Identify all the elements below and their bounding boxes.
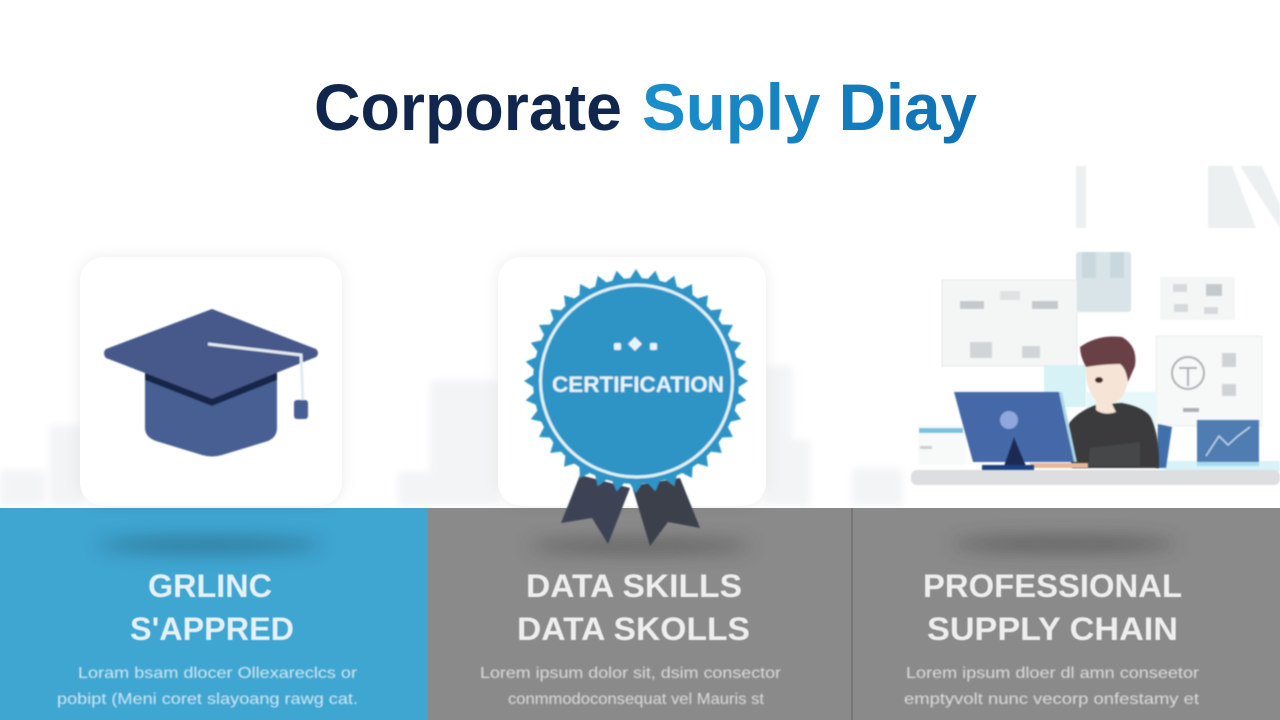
- icon: certification badge: [524, 269, 748, 546]
- panel heading: DATA SKOLLS: [517, 611, 750, 647]
- chair: [1156, 424, 1172, 468]
- panel body text: [480, 665, 782, 708]
- wall chart panel right: [1156, 336, 1262, 426]
- ribbon right: [632, 478, 700, 546]
- icon: graduation cap: [104, 309, 318, 456]
- panel heading: [130, 568, 294, 647]
- panel: professional supply chain: [853, 508, 1280, 720]
- monitor: [954, 392, 1077, 470]
- panel body text: [904, 665, 1200, 708]
- head: [1085, 358, 1128, 414]
- wall chart panel left: [942, 280, 1077, 366]
- faint background shelves: [1076, 166, 1280, 312]
- panel shadow: [98, 538, 322, 552]
- badge seal: [524, 269, 748, 493]
- panel: data skills: [428, 508, 852, 720]
- hair: [1080, 336, 1135, 382]
- panel: grlinc sapped: [0, 508, 428, 720]
- panel shadow: [952, 537, 1176, 551]
- title: Corporate: [314, 70, 622, 144]
- badge label: CERTIFICATION: [552, 372, 724, 397]
- torso: [1068, 403, 1159, 468]
- card: graduation cap: [80, 257, 342, 506]
- small chart tablet: [1197, 420, 1259, 466]
- desk papers: [918, 425, 966, 465]
- ribbon left: [561, 475, 630, 544]
- person: [1068, 336, 1159, 468]
- panel body text: Loram bsam dlocer Ollexareclcs or: [78, 665, 358, 682]
- background skyline: [0, 366, 902, 506]
- illustration: person at desk: [911, 166, 1280, 485]
- desk: [911, 461, 1280, 485]
- panel heading: [517, 568, 750, 647]
- panel body text: Lorem ipsum dolor sit, dsim consector: [480, 665, 782, 682]
- title: Suply Diay: [642, 70, 977, 144]
- wall chart panel top right: [1160, 277, 1235, 320]
- panel body text: emptyvolt nunc vecorp onfestamy et: [904, 691, 1200, 708]
- panel body text: [57, 665, 358, 708]
- panel heading: DATA SKILLS: [526, 568, 742, 604]
- panel heading: [923, 568, 1182, 647]
- panel body text: Lorem ipsum dloer dl amn conseetor: [906, 665, 1200, 682]
- badge dots: [614, 337, 657, 351]
- card: certification: [498, 257, 766, 506]
- tassel: [294, 400, 308, 419]
- cyan wall block: [1044, 365, 1086, 407]
- tassel cord: [208, 344, 303, 402]
- panel shadow: [528, 539, 752, 553]
- panel body text: conmmodoconsequat vel Mauris st: [508, 691, 765, 708]
- keyboard: [1030, 463, 1088, 468]
- panel heading: SUPPLY CHAIN: [927, 611, 1178, 647]
- panel heading: PROFESSIONAL: [923, 568, 1182, 604]
- title: [314, 70, 977, 144]
- panel heading: GRLINC: [148, 568, 272, 604]
- panel heading: S'APPRED: [130, 611, 294, 647]
- panel body text: pobipt (Meni coret slayoang rawg cat.: [57, 691, 358, 708]
